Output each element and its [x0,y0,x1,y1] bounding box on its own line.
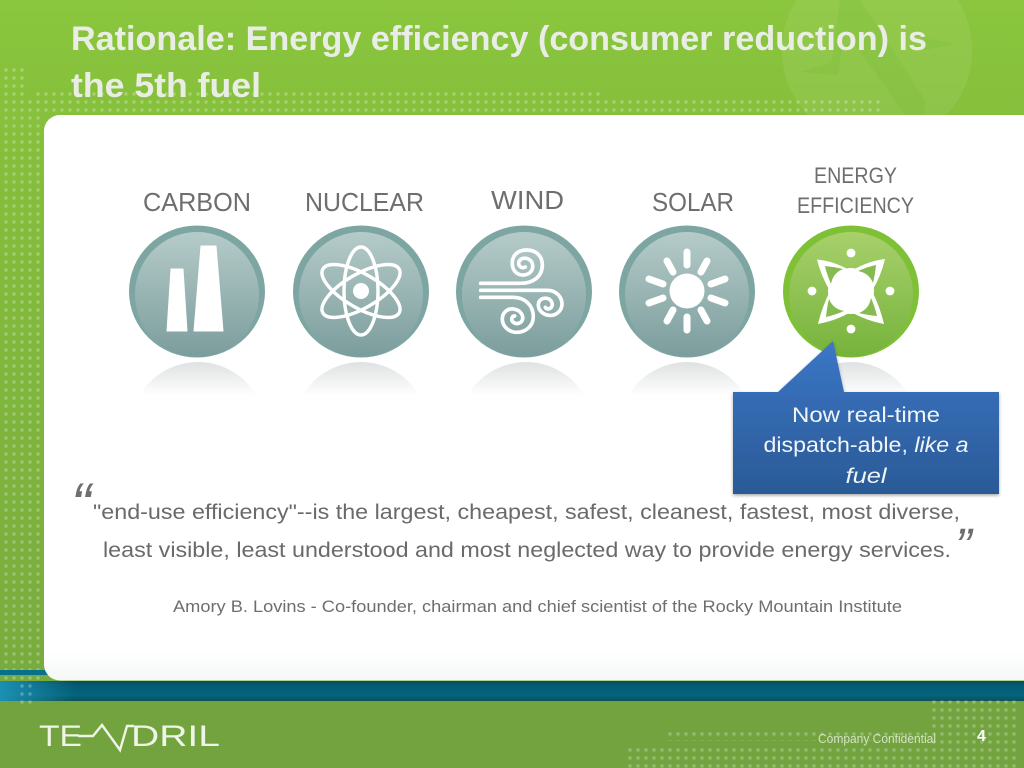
panel: energy efficiency [783,163,919,396]
footer: company confidential: Company Confidential [818,732,936,746]
label: wind: WIND [491,185,564,215]
title [71,20,927,105]
opening quotation mark: “ [71,471,94,538]
icon: sun [649,252,725,330]
button: nuclear [293,226,429,358]
teal footer band [0,681,1024,701]
icon: atom [314,247,408,335]
reflection: nuclear [303,362,419,396]
label: nuclear: NUCLEAR [305,187,424,217]
logo: Tendril: DRIL [131,720,220,753]
closing quotation mark: ” [955,518,974,574]
button: wind [456,226,592,358]
button: energy efficiency [783,226,919,358]
label: carbon: CARBON [143,187,251,217]
white content card [44,115,1024,680]
icon: smokestacks [167,246,223,331]
callout: fuel [846,465,888,488]
green footer [0,701,1024,768]
title: Rationale: Energy efficiency (consumer reduction) is [71,20,927,58]
quote text [93,501,960,562]
reflection: wind [468,362,584,396]
quote text: "end-use efficiency"--is the largest, cheapest, safest, cleanest, fastest, most diverse, [93,501,960,524]
callout: Now real-time [792,404,940,427]
quote text: least visible, least understood and most neglected way to provide energy services. [103,539,951,562]
icon: efficiency star [808,249,894,333]
reflection: carbon [140,362,256,396]
icon: wind swirls [481,250,562,332]
callout: dispatch-able, like a [764,434,968,457]
title: the 5th fuel [71,67,261,105]
attribution: Amory B. Lovins - Co-founder, chairman and chief scientist of the Rocky Mountain Institute [173,598,902,616]
page number: 4 [977,728,986,745]
panel: carbon [129,187,265,396]
button: carbon [129,226,265,358]
footer dot pattern [16,684,1018,768]
reflection: energy efficiency [793,362,909,396]
left teal stripe [0,670,50,675]
label: energy efficiency [797,163,914,218]
button: solar [619,226,755,358]
panel: wind [456,185,592,396]
label: solar: SOLAR [652,187,734,217]
label: energy efficiency: EFFICIENCY [797,193,914,218]
panel: solar [619,187,755,396]
watermark logo circle [782,0,972,115]
label: energy efficiency: ENERGY [814,163,897,188]
logo: Tendril [39,720,220,753]
callout [733,341,999,494]
panel: nuclear [293,187,429,396]
header dot pattern [0,64,880,685]
logo: Tendril: TE [39,720,82,753]
reflection: solar [629,362,745,396]
